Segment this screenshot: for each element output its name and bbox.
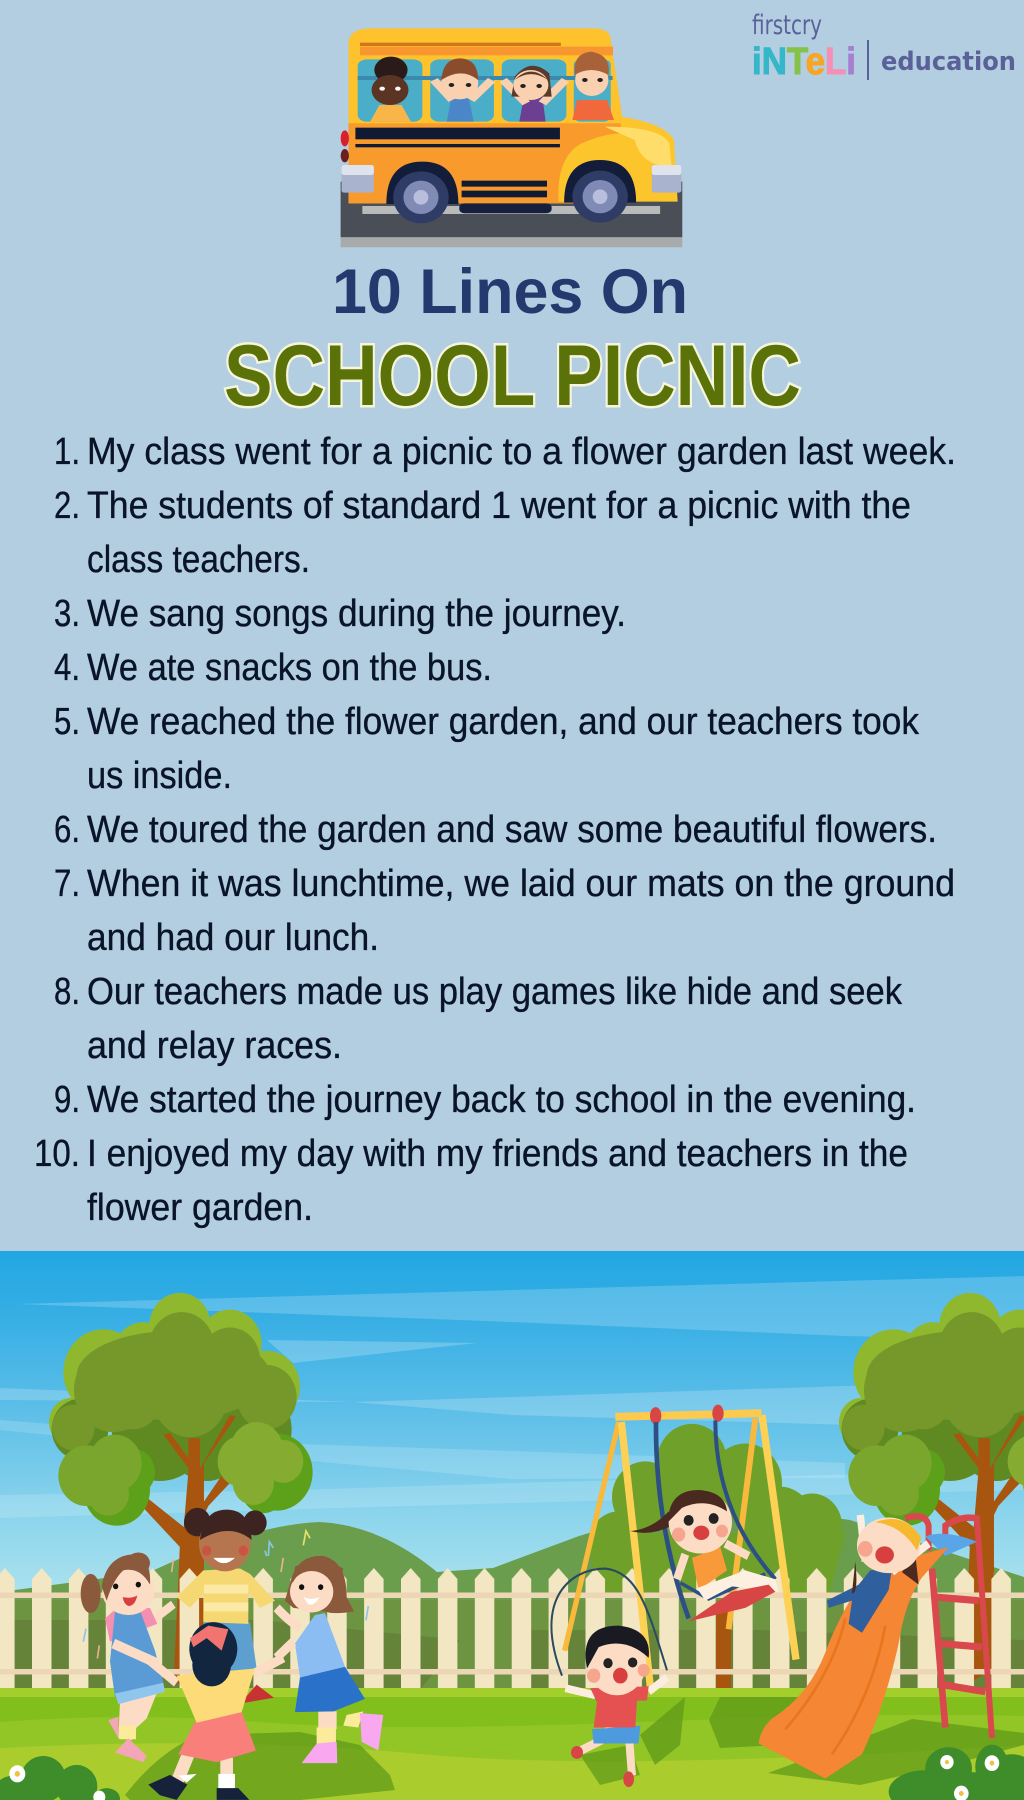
child: girl seen from behind <box>147 1622 283 1800</box>
fence backdrop <box>0 1600 1024 1690</box>
item 3: 3. <box>54 593 80 635</box>
music notes <box>83 1531 368 1659</box>
bush: bottom left <box>0 1756 120 1800</box>
logo: intelli: iNTeLi <box>752 41 856 83</box>
item 4: 4. <box>54 647 80 689</box>
child: window three <box>503 66 565 122</box>
item 2 <box>54 485 911 581</box>
item 1: My class went for a picnic to a flower garden last week. <box>87 431 956 473</box>
ground <box>0 1688 1024 1800</box>
sky <box>0 1251 1024 1601</box>
heading: School Picnic: SCHOOL PICNIC <box>224 328 801 424</box>
item 5: us inside. <box>87 755 232 797</box>
fence <box>0 1568 1024 1688</box>
item 9: We started the journey back to school in the evening. <box>87 1079 916 1121</box>
item 7 <box>54 863 955 959</box>
item 3: We sang songs during the journey. <box>87 593 626 635</box>
logo: firstcry: firstcry <box>752 10 822 41</box>
item 5 <box>54 701 920 797</box>
child: boy with skipping rope <box>551 1569 667 1787</box>
child: window one <box>370 57 411 122</box>
logo <box>752 10 1016 83</box>
item 8 <box>54 971 903 1067</box>
heading: 10 Lines On: 10 Lines On <box>332 257 688 327</box>
child: girl on slide <box>827 1515 929 1633</box>
logo: education: education <box>881 47 1016 77</box>
tree: left <box>49 1293 313 1686</box>
item 10: I enjoyed my day with my friends and teachers in the <box>87 1133 908 1175</box>
icon: school bus <box>341 28 682 247</box>
item 7: 7. <box>54 863 80 905</box>
item 4: We ate snacks on the bus. <box>87 647 492 689</box>
swing set <box>565 1405 796 1686</box>
road <box>341 182 682 247</box>
bus windows <box>358 59 613 122</box>
bush: bottom right <box>889 1745 1024 1800</box>
item 7: When it was lunchtime, we laid our mats on the ground <box>87 863 955 905</box>
item 8: Our teachers made us play games like hide and seek <box>87 971 903 1013</box>
swing backdrop trees <box>589 1424 845 1688</box>
ground shadows <box>125 1697 1024 1800</box>
playground scene <box>0 1251 1024 1800</box>
numbered list <box>34 431 956 1229</box>
item 6: We toured the garden and saw some beautiful flowers. <box>87 809 937 851</box>
item 8: 8. <box>54 971 80 1013</box>
item 5: 5. <box>54 701 80 743</box>
bus body <box>348 28 678 213</box>
child: girl in striped shirt <box>177 1508 275 1704</box>
logo: divider <box>867 40 869 80</box>
item 10: flower garden. <box>87 1187 313 1229</box>
clouds <box>0 1276 1024 1518</box>
child: girl on swing <box>630 1490 779 1621</box>
item 2: The students of standard 1 went for a picnic with the <box>87 485 911 527</box>
item 2: class teachers. <box>87 539 310 581</box>
child: window four <box>572 52 614 120</box>
child: girl in overalls <box>81 1552 173 1762</box>
tree: right <box>839 1293 1024 1686</box>
child: girl in blue shirt <box>277 1556 383 1763</box>
bus bumpers and lights <box>341 130 681 193</box>
item 9: 9. <box>54 1079 80 1121</box>
item 8: and relay races. <box>87 1025 342 1067</box>
item 1: 1. <box>54 431 80 473</box>
item 7: and had our lunch. <box>87 917 379 959</box>
child: window two <box>434 58 492 122</box>
item 5: We reached the flower garden, and our teachers took <box>87 701 920 743</box>
item 10 <box>34 1133 908 1229</box>
slide and ladder <box>759 1516 992 1779</box>
item 10: 10. <box>34 1133 80 1175</box>
item 6: 6. <box>54 809 80 851</box>
item 2: 2. <box>54 485 80 527</box>
hills <box>0 1500 1024 1700</box>
bus wheels <box>386 160 636 223</box>
